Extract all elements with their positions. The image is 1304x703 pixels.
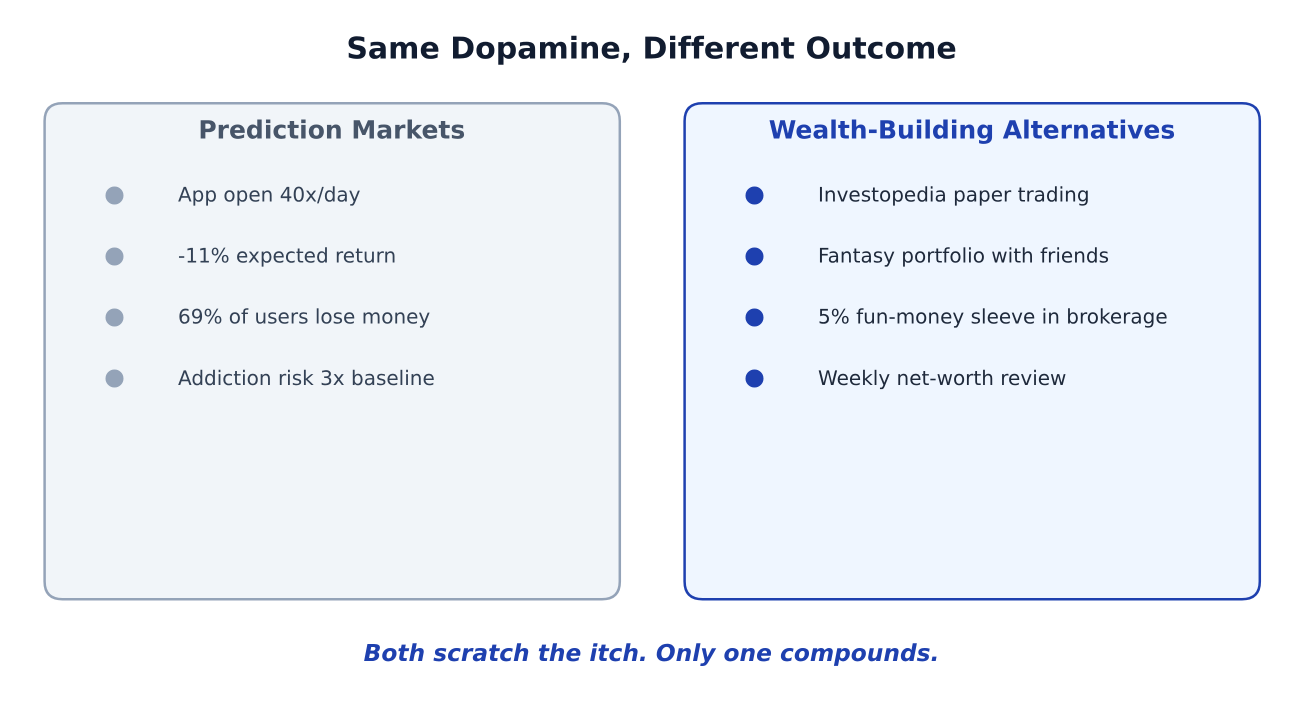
tagline: Both scratch the itch. Only one compounds. bbox=[364, 640, 939, 667]
heading: wealth-building alternatives: Wealth-Building Alternatives bbox=[769, 115, 1175, 144]
heading: prediction markets: Prediction Markets bbox=[198, 115, 465, 144]
title: Same Dopamine, Different Outcome bbox=[346, 32, 957, 66]
bullet: addiction risk: Addiction risk 3x baseline bbox=[178, 366, 435, 390]
bullet: expected return: -11% expected return bbox=[178, 244, 396, 268]
bullet: fantasy portfolio: Fantasy portfolio with friends bbox=[818, 244, 1109, 268]
bullet: app opens: App open 40x/day bbox=[178, 182, 361, 206]
bullet: users lose money: 69% of users lose money bbox=[178, 304, 430, 328]
bullet: net-worth review: Weekly net-worth review bbox=[818, 366, 1066, 390]
panel: wealth-building alternatives bbox=[685, 103, 1260, 599]
bullet: fun-money sleeve: 5% fun-money sleeve in brokerage bbox=[818, 304, 1168, 328]
panel: prediction markets bbox=[45, 103, 620, 599]
bullet: paper trading: Investopedia paper trading bbox=[818, 182, 1090, 206]
